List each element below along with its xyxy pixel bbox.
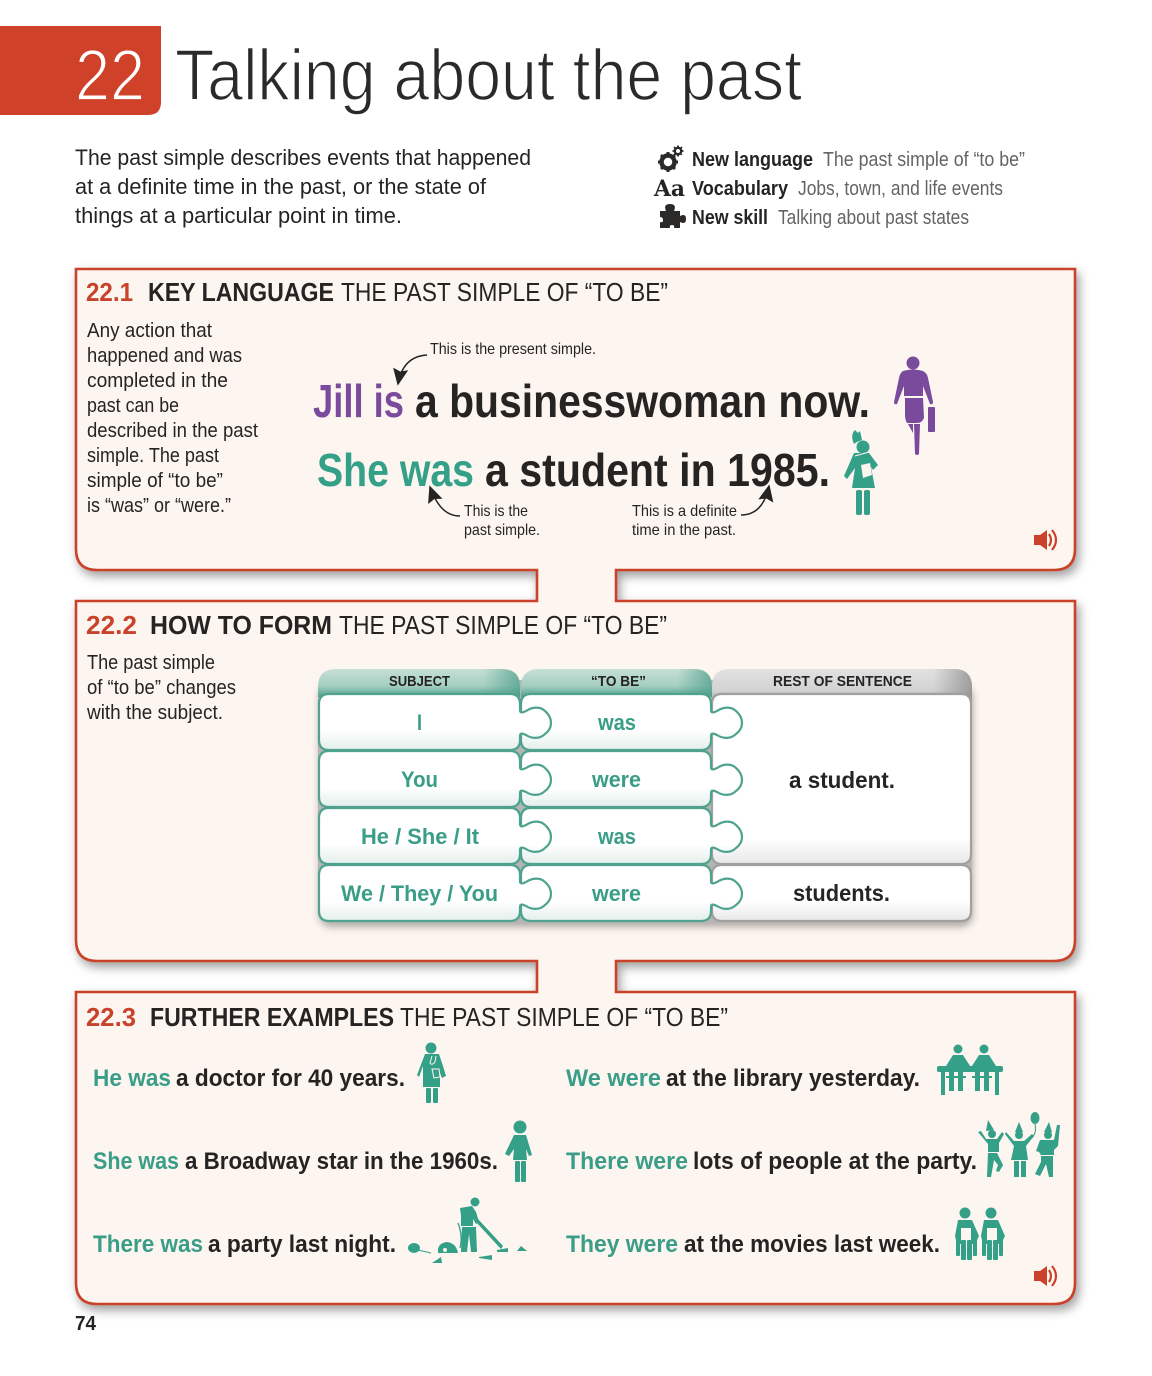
panel: 22.3 further examples <box>86 1002 1060 1286</box>
subject cells: He / She / It <box>361 824 480 849</box>
example sentence: past: She was <box>317 444 474 496</box>
icon: person vacuuming after party <box>408 1198 527 1263</box>
example: party <box>93 1231 396 1258</box>
heading 22.2 <box>86 610 667 640</box>
heading 22.1 <box>86 277 668 307</box>
annotation: definite time: This is a definite <box>632 503 737 520</box>
rest cell: students <box>712 865 971 921</box>
icon: speaker <box>1034 1266 1056 1286</box>
column header: rest of sentence <box>712 669 972 705</box>
panel backgrounds with connectors <box>76 269 1075 1304</box>
summary: new language, vocabulary, new skill: The past simple of “to be” <box>823 149 1025 171</box>
explanation text: with the subject. <box>86 702 223 724</box>
example: library: We were <box>566 1065 661 1092</box>
summary: new language, vocabulary, new skill <box>653 146 1025 229</box>
example: doctor: He was <box>93 1065 171 1092</box>
heading 22.1: 22.1 <box>86 277 133 307</box>
icon: gears <box>658 146 684 172</box>
to be cells: was <box>597 710 636 735</box>
annotation: definite time <box>632 486 769 539</box>
annotation: present simple: This is the present simple. <box>430 341 596 358</box>
summary: new language, vocabulary, new skill: Jobs, town, and life events <box>798 178 1003 200</box>
example: Broadway star: a Broadway star in the 1960s. <box>185 1148 498 1175</box>
title: Talking about the past <box>175 36 802 116</box>
annotation: past simple: This is the <box>464 503 528 520</box>
heading 22.3 <box>86 1002 728 1032</box>
icon: people at the movies <box>955 1208 1005 1260</box>
rest cell: students: students. <box>793 880 890 906</box>
example sentence: past: a student in 1985. <box>485 444 830 496</box>
heading 22.1: KEY LANGUAGE <box>148 277 334 307</box>
to be cells: were <box>591 767 641 792</box>
example sentence: present: a businesswoman now. <box>415 375 870 427</box>
summary: new language, vocabulary, new skill: Talking about past states <box>778 207 969 229</box>
example: party people: lots of people at the party. <box>693 1148 977 1175</box>
header tab with chapter number <box>0 26 161 116</box>
rest cell: a student: a student. <box>789 767 895 793</box>
annotation: present simple <box>398 341 596 384</box>
icon: student <box>844 430 878 515</box>
example: party people: There were <box>566 1148 688 1175</box>
panel: 22.2 how to form <box>86 610 972 922</box>
example: Broadway star: She was <box>93 1148 179 1175</box>
icon: people at party with balloon <box>978 1112 1060 1177</box>
example: party people <box>566 1148 977 1175</box>
example: doctor: a doctor for 40 years. <box>176 1065 405 1092</box>
explanation text: The past simple <box>87 652 215 674</box>
subject cells: We / They / You <box>341 881 498 906</box>
icon: speaker <box>1034 530 1056 550</box>
heading 22.2: 22.2 <box>86 610 137 640</box>
header tab with chapter number: 22 <box>75 36 145 116</box>
icon: Broadway star <box>505 1120 532 1182</box>
to be cells <box>521 694 742 921</box>
annotation: definite time: time in the past. <box>632 522 736 539</box>
example: movies <box>566 1231 940 1258</box>
annotation: past simple <box>430 487 540 539</box>
table shadow <box>318 680 972 922</box>
subject cells: You <box>401 767 438 792</box>
icon: doctor <box>417 1042 446 1103</box>
explanation text: is “was” or “were.” <box>87 495 231 517</box>
column header: rest of sentence: REST OF SENTENCE <box>773 673 912 690</box>
example sentence: past <box>317 444 830 496</box>
heading 22.1: THE PAST SIMPLE OF “TO BE” <box>341 277 668 307</box>
explanation text: completed in the <box>87 370 228 392</box>
icon: people at library table <box>937 1044 1003 1095</box>
icon: puzzle piece <box>660 204 686 228</box>
explanation text: of “to be” changes <box>87 677 236 699</box>
icon: Aa: Aa <box>653 176 685 202</box>
column header: to be: “TO BE” <box>591 673 646 690</box>
example: movies: at the movies last week. <box>684 1231 940 1258</box>
table: forming the past simple <box>318 669 972 922</box>
example: party: a party last night. <box>208 1231 396 1258</box>
summary: new language, vocabulary, new skill: New skill <box>692 207 768 229</box>
example: party: There was <box>93 1231 203 1258</box>
page number: 74 <box>75 1313 97 1335</box>
explanation text: described in the past <box>87 420 258 442</box>
explanation text: simple. The past <box>87 445 219 467</box>
annotation: past simple: past simple. <box>464 522 540 539</box>
summary: new language, vocabulary, new skill: Vocabulary <box>692 178 789 200</box>
explanation text: simple of “to be” <box>87 470 223 492</box>
to be cells: were <box>591 881 641 906</box>
icon: businesswoman <box>894 356 935 455</box>
explanation text <box>87 320 258 517</box>
intro text <box>75 145 531 228</box>
rest cell: a student <box>712 694 971 864</box>
explanation text <box>86 652 236 724</box>
intro text: things at a particular point in time. <box>75 203 402 228</box>
explanation text: happened and was <box>87 345 242 367</box>
subject cells <box>319 694 551 921</box>
heading 22.2: HOW TO FORM <box>150 610 332 640</box>
intro text: The past simple describes events that happened <box>75 145 531 170</box>
subject cells: I <box>417 710 422 735</box>
panel: 22.1 key language <box>86 277 1056 550</box>
explanation text: past can be <box>87 395 179 417</box>
intro text: at a definite time in the past, or the state of <box>75 174 487 199</box>
heading 22.2: THE PAST SIMPLE OF “TO BE” <box>339 610 667 640</box>
summary: new language, vocabulary, new skill: New language <box>692 149 813 171</box>
column header: subject <box>318 669 520 697</box>
to be cells: was <box>597 824 636 849</box>
column header: subject: SUBJECT <box>389 673 450 690</box>
example: movies: They were <box>566 1231 678 1258</box>
explanation text: Any action that <box>87 320 212 342</box>
example: library <box>566 1065 920 1092</box>
heading 22.3: FURTHER EXAMPLES <box>150 1002 394 1032</box>
example sentence: present: Jill is <box>313 375 404 427</box>
column header: to be <box>521 669 712 697</box>
heading 22.3: 22.3 <box>86 1002 136 1032</box>
heading 22.3: THE PAST SIMPLE OF “TO BE” <box>400 1002 728 1032</box>
example: library: at the library yesterday. <box>666 1065 920 1092</box>
